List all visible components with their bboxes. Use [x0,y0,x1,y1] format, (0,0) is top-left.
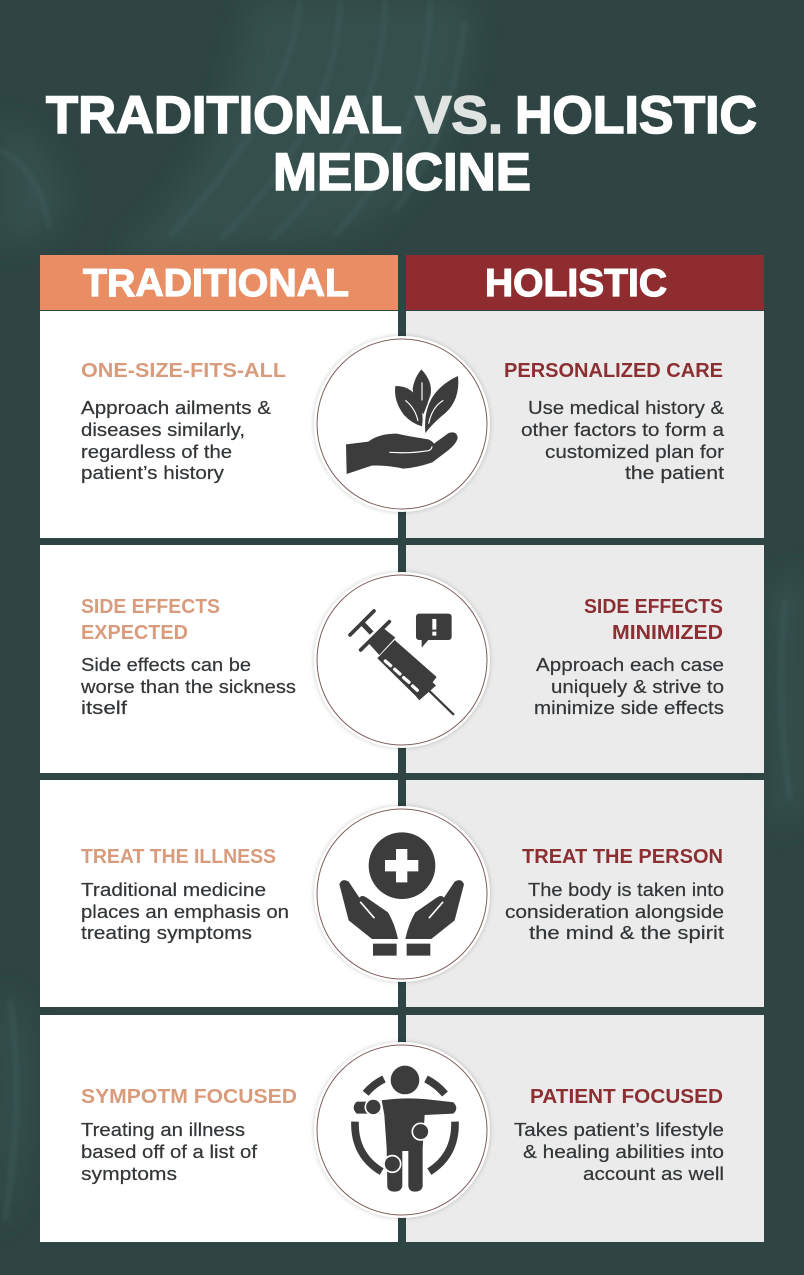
panel: one-size-fits-all: diseases similarly, [81,420,245,440]
title: VS. [415,86,503,145]
panel: patient focused: & healing abilities into [523,1142,724,1162]
panel: symptom focused: SYMPOTM FOCUSED [81,1086,297,1108]
panel: one-size-fits-all: ONE-SIZE-FITS-ALL [81,360,286,382]
panel: treat the person: The body is taken into [528,880,724,900]
icon: hand holding plant [314,336,490,512]
panel: patient focused: account as well [583,1164,724,1184]
panel: side effects expected: EXPECTED [81,622,188,644]
panel: side effects expected [40,545,398,773]
panel: personalized care: customized plan for [545,442,724,462]
panel: personalized care: the patient [625,463,724,483]
panel: patient focused: Takes patient’s lifestyle [514,1120,724,1140]
panel: side effects expected: Side effects can be [81,655,251,675]
panel: side effects expected: itself [81,698,128,718]
panel: side effects expected: SIDE EFFECTS [81,596,220,618]
panel: personalized care: PERSONALIZED CARE [504,360,723,382]
title: TRADITIONAL [46,86,402,145]
panel: side effects minimized [406,545,764,773]
panel: personalized care: other factors to form a [521,420,725,440]
panel: patient focused [406,1015,764,1242]
panel: one-size-fits-all: regardless of the [81,442,232,462]
panel: patient focused: PATIENT FOCUSED [530,1086,723,1108]
panel: one-size-fits-all: patient’s history [81,463,224,483]
panel: treat the person: consideration alongside [505,902,724,922]
column header: traditional [40,255,398,310]
icon: human body with pain points [314,1042,490,1218]
title: MEDICINE [273,143,531,202]
panel: personalized care: Use medical history & [528,398,724,418]
panel: treat the illness: treating symptoms [81,923,252,943]
panel: one-size-fits-all [40,311,398,538]
panel: treat the illness: TREAT THE ILLNESS [81,846,276,868]
panel: side effects expected: worse than the sickness [80,677,296,697]
panel: side effects minimized: uniquely & strive to [551,677,724,697]
panel: treat the illness: Traditional medicine [81,880,266,900]
panel: treat the illness [40,780,398,1007]
panel: treat the person [406,780,764,1007]
title: HOLISTIC [515,86,757,145]
panel: one-size-fits-all: Approach ailments & [81,398,271,418]
icon: hands with medical cross [314,806,490,982]
panel: treat the illness: places an emphasis on [81,902,289,922]
column header: holistic: HOLISTIC [485,262,667,305]
panel: side effects minimized: MINIMIZED [612,622,723,644]
panel: personalized care [406,311,764,538]
panel: side effects minimized: minimize side effects [534,698,724,718]
panel: treat the person: TREAT THE PERSON [522,846,723,868]
panel: side effects minimized: Approach each case [536,655,724,675]
panel: side effects minimized: SIDE EFFECTS [584,596,723,618]
panel: symptom focused: symptoms [81,1164,177,1184]
panel: treat the person: the mind & the spirit [529,923,724,943]
column header: holistic [406,255,764,310]
panel: symptom focused [40,1015,398,1242]
icon: syringe with alert [314,572,490,748]
panel: symptom focused: based off of a list of [81,1142,258,1162]
panel: symptom focused: Treating an illness [81,1120,245,1140]
title [46,86,757,202]
column header: traditional: TRADITIONAL [83,262,349,305]
